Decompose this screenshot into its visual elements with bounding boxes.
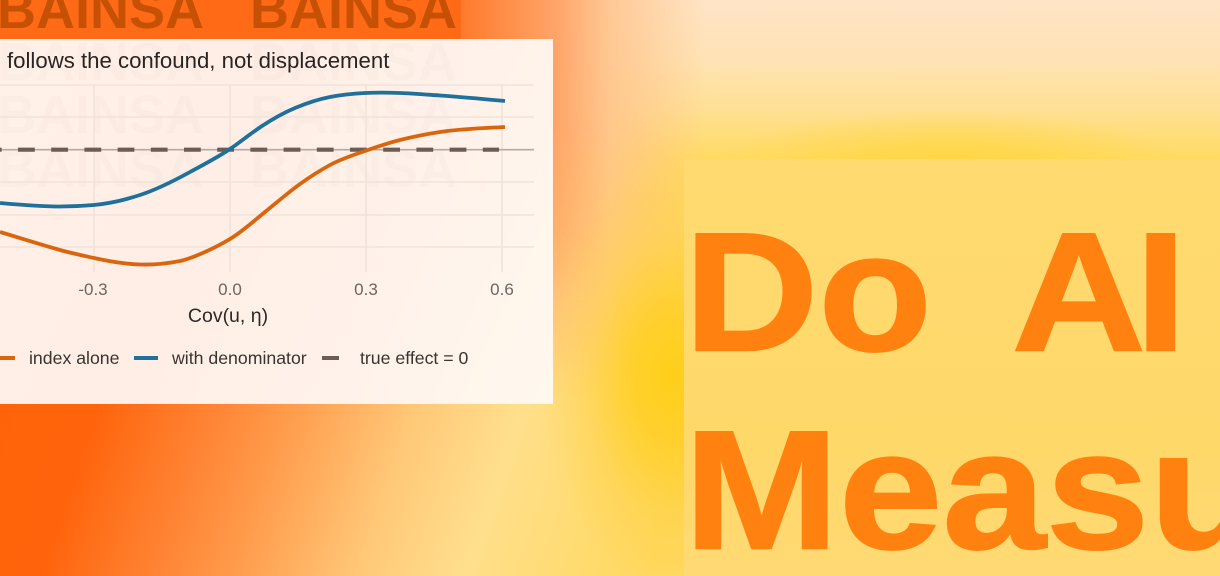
- faint watermark: BAINSA: [0, 85, 204, 145]
- x axis tick labels: -0.3: [78, 280, 108, 299]
- chart: [0, 39, 534, 368]
- chart heading: follows the confound, not displacement: [7, 48, 389, 73]
- title panel: [684, 159, 1220, 576]
- x axis title: Cov(u, η): [188, 305, 268, 327]
- chart panel: [0, 39, 553, 404]
- title: Do AI: [684, 198, 1187, 387]
- x axis tick labels: 0.0: [218, 280, 242, 299]
- curve: index alone: [0, 127, 505, 265]
- faint watermark: BAINSA: [250, 139, 457, 199]
- faint watermark: [0, 32, 457, 199]
- x axis tick labels: 0.6: [490, 280, 514, 299]
- x axis tick labels: [78, 280, 514, 299]
- watermark header: [0, 0, 457, 39]
- faint watermark: BAINSA: [250, 85, 457, 145]
- top-left orange band: [0, 0, 461, 39]
- curve: with denominator: [0, 93, 505, 206]
- zero line: [0, 149, 534, 151]
- legend: with denominator: [171, 348, 307, 368]
- legend: index alone: [29, 348, 120, 368]
- grid lines: [0, 85, 534, 272]
- title: [684, 198, 1220, 576]
- legend: [0, 348, 468, 368]
- faint watermark: BAINSA: [0, 139, 204, 199]
- legend: true effect = 0: [360, 348, 468, 368]
- x axis tick labels: 0.3: [354, 280, 378, 299]
- dashed true effect line: [0, 148, 499, 152]
